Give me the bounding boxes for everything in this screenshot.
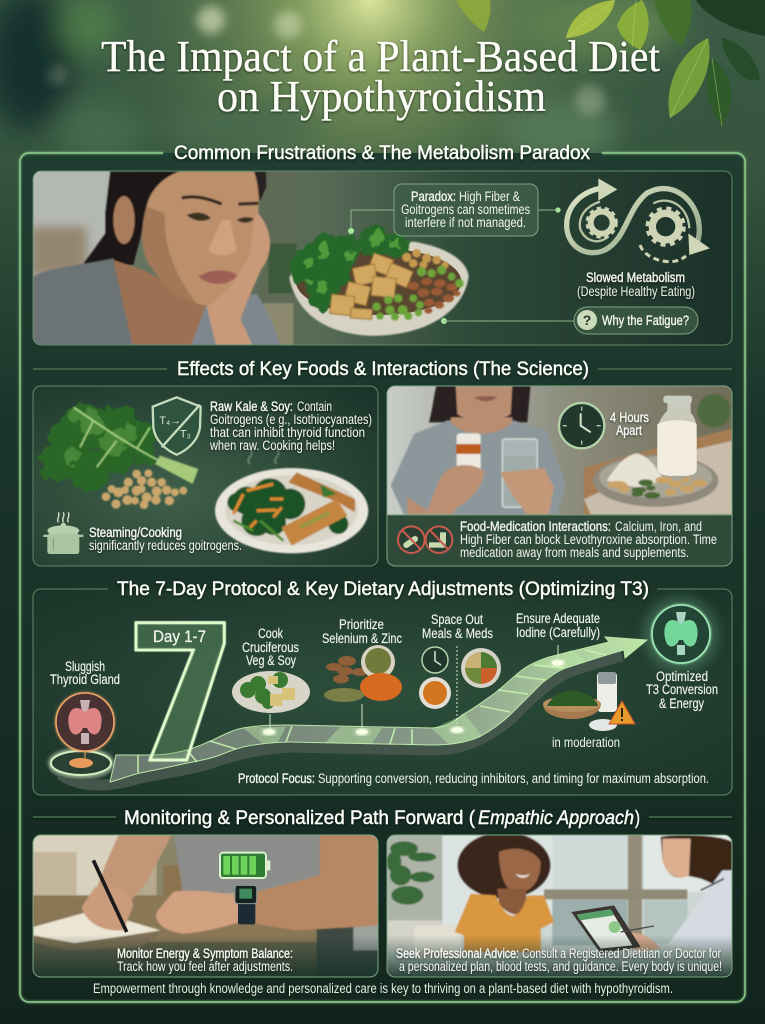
photo: writing in journal with smartwatch (30, 832, 382, 982)
step: space out meals: Space Out (431, 612, 483, 627)
panel: raw kale and soy (33, 386, 378, 566)
icon: slowed metabolism gears loop (567, 178, 710, 262)
step: sluggish thyroid (50, 659, 120, 751)
text: monitor energy: Monitor Energy & Symptom Balance: (117, 946, 293, 961)
text: seek professional advice: Seek Professional Advice: (396, 946, 519, 961)
caption bar: interactions: Calcium, Iron, and (615, 519, 702, 534)
leaves: top right foliage (456, 0, 765, 126)
icon: four hours clock (559, 403, 604, 448)
step: optimized t3: T3 Conversion (646, 682, 718, 697)
text: slowed metabolism: (Despite Healthy Eating) (577, 284, 695, 299)
callout: paradox: interfere if not managed. (405, 215, 526, 230)
step: cook cruciferous: Cruciferous (242, 640, 299, 655)
text: raw kale and soy (209, 399, 372, 453)
step: iodine: in moderation (552, 735, 620, 750)
icon: big seven (136, 623, 224, 760)
photo: woman with pill bottle and water (391, 384, 736, 515)
step: space out meals: Meals & Meds (422, 626, 493, 641)
text: steaming: significantly reduces goitrogens. (89, 538, 242, 553)
step: selenium zinc: Selenium & Zinc (322, 631, 402, 646)
photo: patient and doctor consultation (387, 832, 734, 959)
panel: seek professional advice (387, 832, 734, 977)
text: raw kale and soy: Goitrogens (e g., Isothiocyanates) (210, 412, 372, 427)
step: optimized t3: & Energy (659, 696, 704, 711)
illustration: kale soybeans plate (39, 403, 368, 553)
caption bar: interactions: medication away from meals and supplements. (460, 545, 689, 560)
title: The Impact of a Plant-Based Diet (101, 32, 660, 81)
caption bar: interactions: High Fiber can block Levothyroxine absorption. Time (460, 532, 717, 547)
caption bar: interactions: Food-Medication Interactions: (460, 519, 611, 534)
step: optimized t3: Optimized (656, 669, 708, 684)
icon: steaming pot (43, 512, 83, 554)
panel: metabolism paradox (30, 170, 732, 348)
step: sluggish thyroid: Sluggish (65, 659, 105, 674)
text: steaming (89, 525, 242, 553)
step: iodine (516, 611, 635, 750)
heading: monitoring (33, 807, 732, 829)
text: steaming: Steaming/Cooking (89, 525, 182, 540)
step: optimized t3 (643, 596, 719, 711)
label: day 1-7: Day 1-7 (153, 627, 206, 646)
text: raw kale and soy: Contain (297, 399, 332, 414)
step: cook cruciferous (232, 626, 310, 734)
photo: kale tofu bowl (289, 226, 469, 336)
text: four hours apart: Apart (616, 423, 642, 438)
text: seek professional advice (396, 946, 722, 974)
callout: why the fatigue: Why the Fatigue? (602, 313, 689, 328)
text: raw kale and soy: when raw. Cooking helps! (209, 438, 335, 453)
text: raw kale and soy: that can inhibit thyroid function (210, 425, 365, 440)
panel: food medication interactions (387, 384, 736, 566)
heading: common frustrations: Common Frustrations & The Metabolism Paradox (174, 142, 590, 164)
text: slowed metabolism: Slowed Metabolism (586, 270, 685, 285)
heading: monitoring: ) (635, 807, 640, 829)
panel: seven day protocol (33, 578, 732, 795)
panel: monitor energy (30, 832, 382, 982)
icon: t4 t3 shield: T₄→ (159, 415, 181, 427)
callout: paradox (348, 184, 561, 236)
heading: effects of key foods: Effects of Key Foods & Interactions (The Science) (177, 358, 589, 380)
text: four hours apart (610, 410, 649, 438)
icon: battery (220, 853, 270, 878)
icon: t4 t3 shield: T₃ (180, 428, 191, 440)
text: monitor energy (117, 946, 293, 974)
title: on Hypothyroidism (217, 72, 546, 121)
step: selenium zinc: Prioritize (339, 617, 384, 632)
step: sluggish thyroid: Thyroid Gland (50, 672, 120, 687)
photo: fatigued woman (30, 170, 297, 348)
callout: paradox: High Fiber & (459, 189, 520, 204)
callout: why the fatigue (441, 307, 698, 334)
step: iodine: Iodine (Carefully) (516, 625, 600, 640)
text: monitor energy: Track how you feel after adjustments. (117, 959, 293, 974)
text: slowed metabolism (577, 270, 695, 299)
heading: monitoring: Monitoring & Personalized Path Forward ( (124, 807, 475, 829)
step: iodine: Ensure Adequate (516, 611, 600, 626)
heading: monitoring: Empathic Approach (478, 807, 634, 829)
outer glowing frame (20, 153, 745, 1002)
caption bar: interactions (387, 515, 732, 566)
text: protocol focus: Protocol Focus: (238, 771, 315, 786)
callout: why the fatigue: ? (583, 312, 591, 328)
step: cook cruciferous: Cook (258, 626, 283, 641)
text: raw kale and soy: Raw Kale & Soy: (210, 399, 293, 414)
heading: protocol: The 7-Day Protocol & Key Dietary Adjustments (Optimizing T3) (117, 578, 649, 600)
icon: t4 t3 shield (153, 397, 201, 455)
marker: start disc (49, 750, 113, 781)
text: four hours apart: 4 Hours (610, 410, 649, 425)
callout: paradox: Goitrogens can sometimes (401, 202, 530, 217)
callout: paradox: Paradox: (411, 189, 456, 204)
step: cook cruciferous: Veg & Soy (246, 653, 296, 668)
path: winding road arrow (60, 637, 647, 785)
step: selenium zinc (322, 617, 402, 734)
title (101, 32, 660, 121)
step: space out meals (419, 612, 501, 732)
